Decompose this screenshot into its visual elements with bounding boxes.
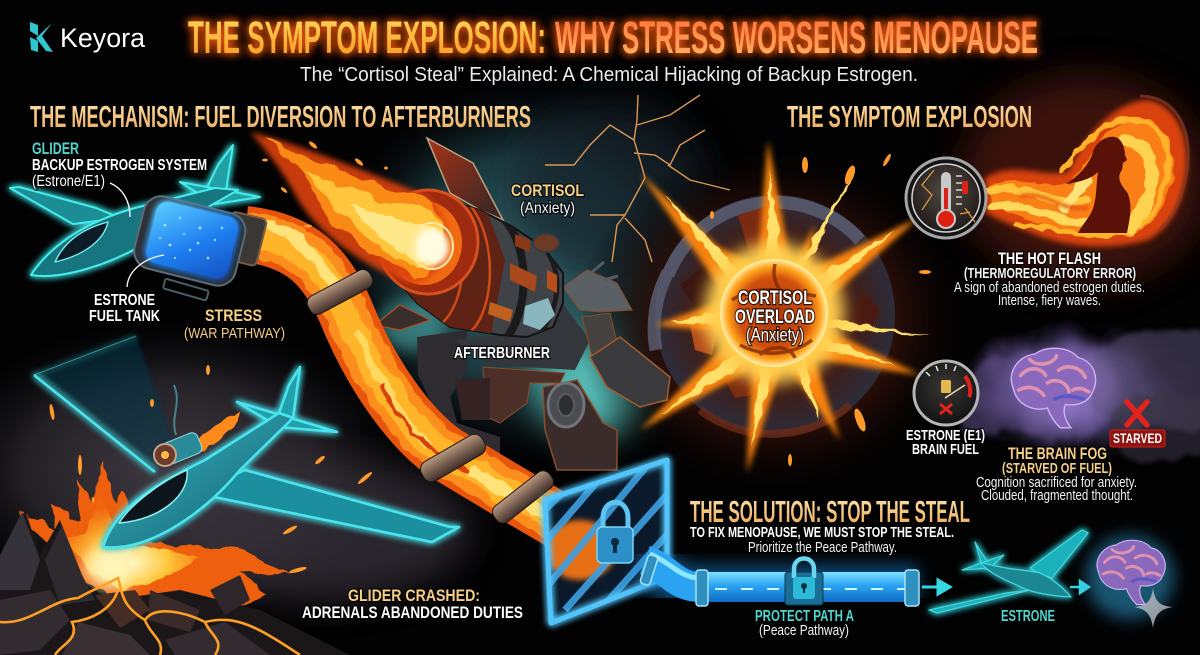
logo: Keyora: Keyora — [60, 23, 146, 53]
label: cortisol — [511, 181, 584, 217]
text: the hot flash — [954, 249, 1145, 309]
explosion rays — [640, 140, 920, 473]
label: cortisol overload: CORTISOL — [738, 288, 812, 309]
heading: the symptom explosion: THE SYMPTOM EXPLOSION — [787, 99, 1032, 134]
label: estrone: ESTRONE — [1001, 608, 1055, 625]
arrow: label to tank — [127, 255, 164, 287]
label: cortisol overload: (Anxiety) — [746, 325, 804, 345]
label: protect path a: PROTECT PATH A — [755, 608, 854, 625]
glider: backup estrogen system — [10, 145, 260, 276]
estrone fuel tank — [130, 192, 267, 301]
engine barrel — [404, 204, 564, 338]
lightning cracks — [545, 95, 730, 262]
glider crashed — [34, 336, 459, 547]
robot: afterburner machine — [375, 138, 670, 470]
label: protect path a — [755, 608, 854, 639]
afterburner flame — [250, 132, 453, 284]
label: afterburner: AFTERBURNER — [454, 345, 550, 362]
hot flash flames — [985, 96, 1188, 246]
label: glider: BACKUP ESTROGEN SYSTEM — [32, 157, 207, 174]
text: the hot flash: A sign of abandoned estrogen duties. — [954, 280, 1145, 296]
label: glider: GLIDER — [32, 139, 79, 158]
pipe padlock — [785, 558, 823, 605]
explosion core — [720, 259, 828, 367]
thermometer — [941, 172, 951, 214]
lower fin — [375, 305, 430, 330]
subtitle: The “Cortisol Steal” Explained: A Chemical Hijacking of Backup Estrogen. — [300, 64, 918, 86]
label: brain fuel gauge: BRAIN FUEL — [912, 441, 979, 458]
label: stress: STRESS — [205, 306, 262, 325]
text: the solution — [690, 494, 970, 556]
label: glider — [32, 139, 207, 190]
label: cortisol overload: OVERLOAD — [735, 307, 815, 328]
robot legs — [417, 330, 617, 470]
flow arrow — [922, 580, 950, 594]
label: estrone fuel tank: ESTRONE — [94, 292, 155, 309]
label: glider crashed: ADRENALS ABANDONED DUTIES — [302, 603, 523, 622]
text: the brain fog: Cognition sacrificed for anxiety. — [976, 475, 1137, 491]
brain fog cloud — [950, 320, 1200, 460]
label: glider crashed — [302, 586, 523, 622]
crash burst — [18, 463, 290, 610]
text: the hot flash: (THERMOREGULATORY ERROR) — [964, 265, 1136, 282]
heading: the mechanism: THE MECHANISM: FUEL DIVERSION TO AFTERBURNERS — [30, 99, 531, 134]
nozzle — [378, 190, 478, 294]
brain: starved of fuel — [1011, 343, 1117, 428]
label: brain fuel gauge: ESTRONE (E1) — [906, 427, 985, 444]
padlock — [603, 502, 628, 530]
title: THE SYMPTOM EXPLOSION: — [188, 12, 546, 63]
label: stress — [184, 306, 285, 342]
label: cortisol: CORTISOL — [511, 181, 584, 200]
text: the brain fog: (STARVED OF FUEL) — [1002, 460, 1112, 477]
label: protect path a: (Peace Pathway) — [759, 622, 849, 639]
crash fire and lava — [0, 463, 350, 655]
text: the brain fog: THE BRAIN FOG — [1008, 444, 1107, 463]
flame inner streak — [1020, 195, 1088, 208]
arm — [563, 262, 670, 407]
starved marker: STARVED — [1113, 430, 1162, 446]
explosion — [640, 140, 930, 473]
fin — [427, 138, 503, 220]
fire pipe: war pathway — [245, 222, 575, 530]
text: the solution: THE SOLUTION: STOP THE STEAL — [690, 494, 970, 529]
text: the brain fog — [976, 444, 1137, 504]
sparks — [49, 140, 931, 574]
label: cortisol: (Anxiety) — [520, 200, 575, 217]
fuel gauge — [914, 361, 978, 425]
watermark sparkle — [1134, 588, 1173, 628]
healthy brain — [1086, 535, 1174, 619]
glider: estrone — [929, 530, 1088, 613]
label: brain fuel gauge — [906, 427, 985, 458]
text: the solution: TO FIX MENOPAUSE, WE MUST STOP THE STEAL. — [690, 525, 954, 541]
label: glider crashed: GLIDER CRASHED: — [348, 586, 480, 605]
crashed glider engine — [154, 385, 240, 466]
thermometer badge — [906, 158, 986, 238]
pipe collar rings — [304, 267, 557, 526]
text: the hot flash: Intense, fiery waves. — [998, 293, 1101, 309]
pipe clamps — [640, 554, 919, 606]
label: estrone fuel tank: FUEL TANK — [89, 308, 160, 325]
woman silhouette — [1066, 137, 1130, 233]
small arrow to brain — [1070, 581, 1089, 593]
label: cortisol overload — [735, 288, 815, 345]
text: the solution: Prioritize the Peace Pathway. — [748, 540, 897, 556]
text: the hot flash: THE HOT FLASH — [998, 249, 1101, 268]
label: estrone fuel tank — [89, 292, 160, 325]
text: the brain fog: Clouded, fragmented thought. — [981, 488, 1133, 504]
torso — [455, 300, 590, 370]
lava rocks — [0, 510, 350, 655]
label: glider: (Estrone/E1) — [32, 173, 105, 190]
arrow: glider to fuselage — [110, 183, 130, 217]
shield lock gate — [530, 455, 680, 623]
starved marker — [1110, 402, 1165, 447]
label: stress: (WAR PATHWAY) — [184, 325, 285, 342]
blue pipe: peace pathway — [640, 554, 950, 606]
